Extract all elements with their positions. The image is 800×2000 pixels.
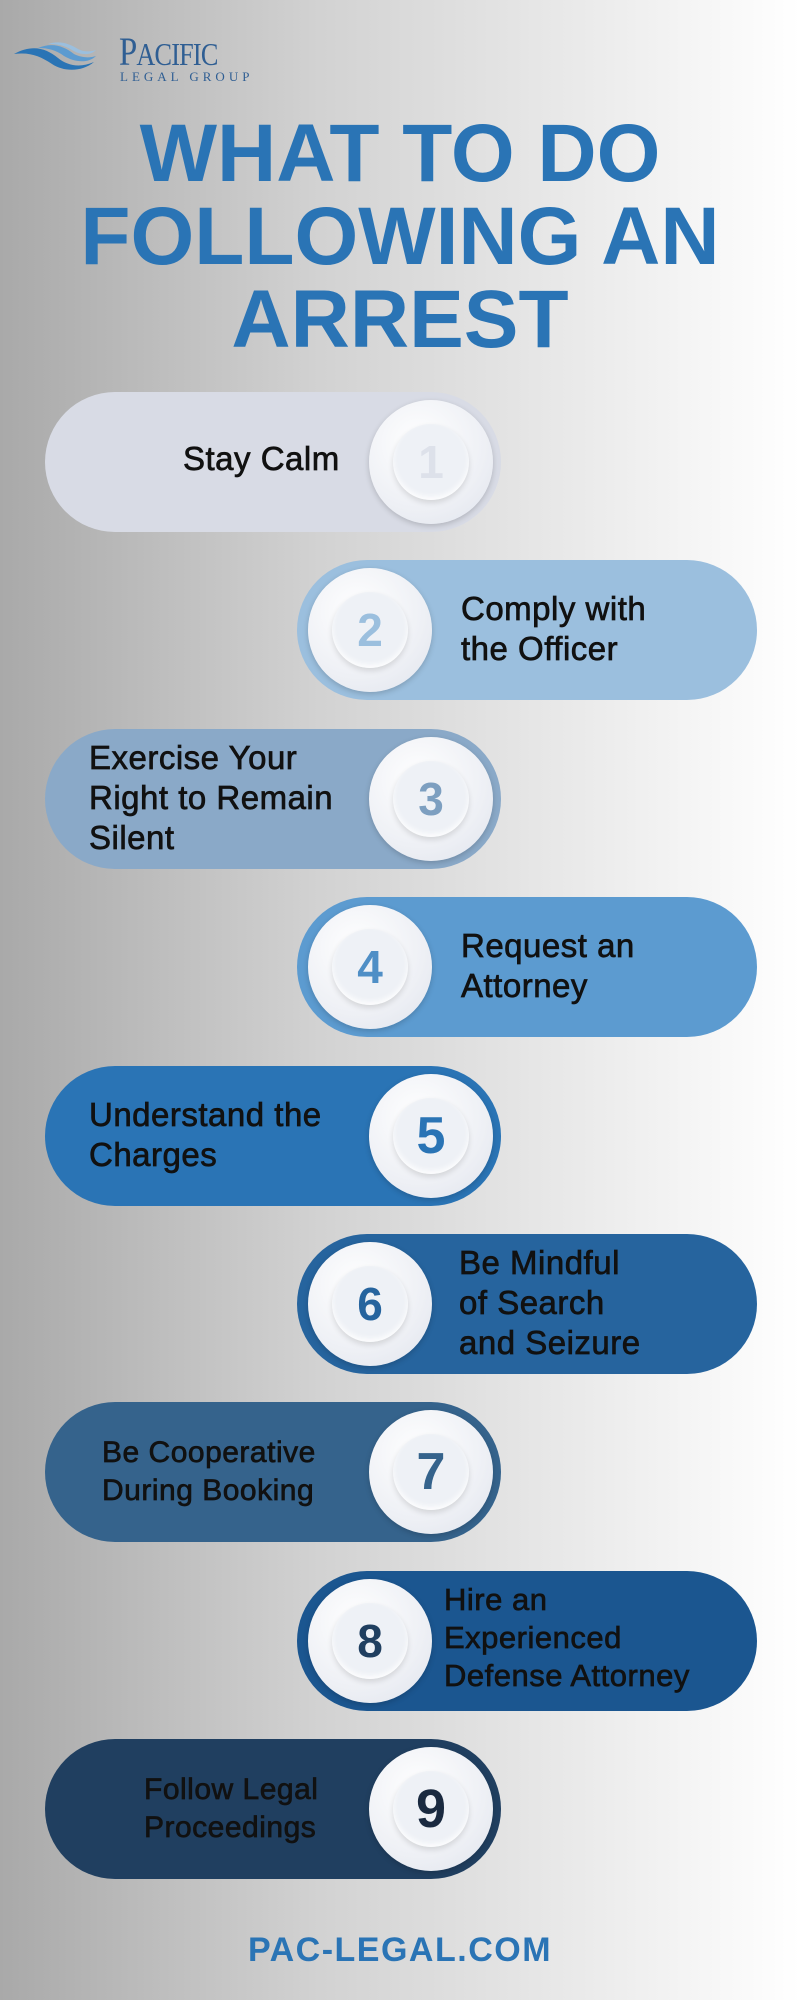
step 8: Hire an [444, 1582, 547, 1617]
step 2: 2 [357, 604, 383, 656]
step 8 [297, 1571, 757, 1711]
step 7: 7 [417, 1443, 445, 1501]
step 5: Understand the [89, 1096, 322, 1133]
step 3: 3 [418, 773, 444, 825]
step 3: Right to Remain [89, 779, 333, 816]
title: WHAT TO DO [140, 108, 660, 199]
step 7 [45, 1402, 501, 1542]
step 8: Experienced [444, 1620, 622, 1655]
step 6: Be Mindful [459, 1244, 620, 1281]
step 1 [45, 392, 501, 532]
icon: waves [14, 42, 96, 70]
logo: LEGAL GROUP [120, 69, 253, 84]
step 6: of Search [459, 1284, 605, 1321]
step 6 [297, 1234, 757, 1374]
step 6: and Seizure [459, 1324, 641, 1361]
step 3: Silent [89, 819, 175, 856]
step 7: Be Cooperative [102, 1436, 316, 1469]
step 9 [45, 1739, 501, 1879]
logo text: PACIFIC [119, 29, 218, 74]
step 9: Follow Legal [144, 1773, 318, 1806]
title [80, 108, 720, 365]
step 4: 4 [357, 941, 383, 993]
title: FOLLOWING AN [80, 191, 720, 282]
step 2: Comply with [461, 590, 646, 627]
step 5 [45, 1066, 501, 1206]
step 4: Attorney [461, 967, 588, 1004]
step 4 [297, 897, 757, 1037]
step 1: Stay Calm [183, 440, 340, 477]
step 5: Charges [89, 1136, 217, 1173]
step 8: 8 [357, 1615, 383, 1667]
step 2 [297, 560, 757, 700]
step 1: 1 [418, 436, 444, 488]
step 9: Proceedings [144, 1811, 316, 1844]
step 7: During Booking [102, 1474, 314, 1507]
step 6: 6 [357, 1278, 383, 1330]
step 8: Defense Attorney [444, 1658, 690, 1693]
step 9: 9 [416, 1779, 446, 1839]
footer url: PAC-LEGAL.COM [248, 1931, 552, 1969]
step 2: the Officer [461, 630, 618, 667]
step 5: 5 [417, 1107, 445, 1165]
step 4: Request an [461, 927, 635, 964]
step 3: Exercise Your [89, 739, 297, 776]
step 3 [45, 729, 501, 869]
logo [14, 29, 253, 84]
title: ARREST [231, 274, 569, 365]
